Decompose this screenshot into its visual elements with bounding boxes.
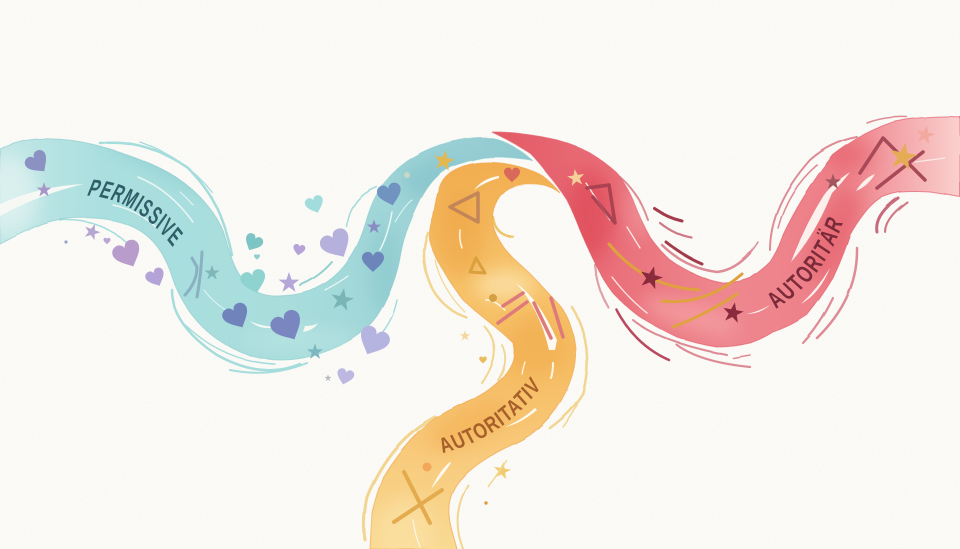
yellow ribbon body [370, 162, 576, 549]
red thin highlights [586, 158, 945, 313]
panel: autoritaer ribbon [492, 116, 960, 368]
yellow outer brush strokes [364, 217, 587, 549]
yellow white highlights [431, 176, 557, 489]
blue outer brush strokes [60, 142, 397, 373]
pink dashes [498, 293, 563, 338]
panel: permissive ribbon [0, 137, 534, 384]
red icons [566, 123, 936, 323]
red outer brush strokes [595, 117, 907, 367]
infographic canvas [0, 116, 960, 549]
label: autoritaer: AUTORITÄR [768, 217, 843, 309]
label: autoritativ: AUTORITATIV [441, 376, 538, 453]
blue dashes [185, 252, 202, 297]
yellow icons [422, 168, 520, 505]
icons: hearts and stars, permissive [22, 148, 456, 387]
blue thin highlights [113, 177, 412, 316]
yellow thin highlights [413, 230, 553, 547]
label: permissive: PERMISSIVE [87, 180, 184, 247]
blue white highlights [0, 184, 318, 332]
red white highlights [746, 172, 875, 314]
yellow cross [394, 472, 442, 523]
blue ribbon body [0, 125, 532, 360]
gold brush lines [609, 244, 742, 327]
panel: autoritativ ribbon [362, 162, 588, 549]
red ribbon body [492, 116, 960, 347]
